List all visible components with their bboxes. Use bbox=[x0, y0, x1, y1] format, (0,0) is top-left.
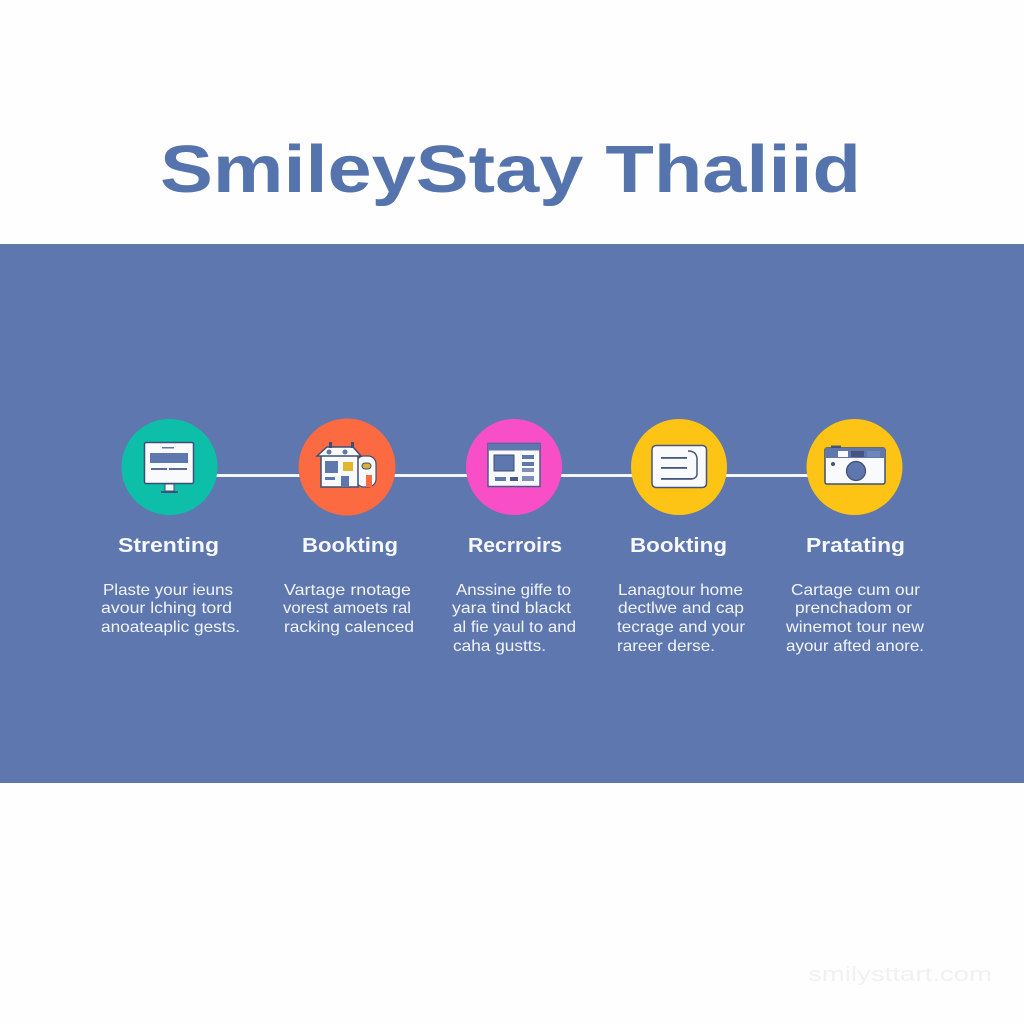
description: rareer derse. bbox=[617, 638, 715, 655]
footer watermark: smilysttart.com bbox=[808, 964, 992, 986]
icon: house bbox=[298, 418, 396, 516]
description: Plaste your ieuns bbox=[103, 582, 233, 599]
step 3: Recrroirs bbox=[452, 419, 576, 655]
description: avour lching tord bbox=[101, 600, 232, 617]
heading: Recrroirs bbox=[468, 534, 562, 557]
step 5: Pratating bbox=[785, 419, 924, 655]
panel: process steps bbox=[0, 244, 1024, 783]
description: vorest amoets ral bbox=[283, 600, 411, 617]
description: winemot tour new bbox=[785, 619, 924, 636]
icon: browser window bbox=[466, 419, 562, 515]
description: al fie yaul to and bbox=[453, 619, 576, 636]
heading: Strenting bbox=[118, 534, 219, 557]
icon: card bbox=[631, 419, 727, 515]
description: anoateaplic gests. bbox=[101, 619, 240, 636]
description: tecrage and your bbox=[617, 619, 746, 636]
description: ayour afted anore. bbox=[786, 638, 924, 655]
description: Cartage cum our bbox=[791, 582, 921, 599]
heading: Bookting bbox=[630, 534, 727, 557]
connector line bbox=[215, 474, 808, 477]
description: racking calenced bbox=[284, 619, 414, 636]
description: caha gustts. bbox=[453, 638, 546, 655]
icon: monitor bbox=[122, 419, 218, 515]
description bbox=[101, 582, 240, 636]
description: prenchadom or bbox=[795, 600, 913, 617]
description: yara tind blackt bbox=[452, 600, 572, 617]
step 1: Strenting bbox=[101, 419, 240, 636]
icon: camera bbox=[806, 419, 902, 515]
description bbox=[785, 582, 924, 655]
description: Anssine giffe to bbox=[456, 582, 571, 599]
description: Lanagtour home bbox=[618, 582, 743, 599]
step 2: Booking bbox=[283, 418, 414, 636]
description: Vartage rnotage bbox=[284, 582, 411, 599]
step 4: Booking bbox=[617, 419, 746, 655]
description bbox=[452, 582, 576, 655]
description bbox=[617, 582, 746, 655]
heading: Bookting bbox=[302, 534, 398, 557]
heading: Pratating bbox=[806, 534, 905, 557]
description: dectlwe and cap bbox=[618, 600, 744, 617]
description bbox=[283, 582, 414, 636]
title: SmileyStay Thaliid bbox=[160, 132, 861, 207]
